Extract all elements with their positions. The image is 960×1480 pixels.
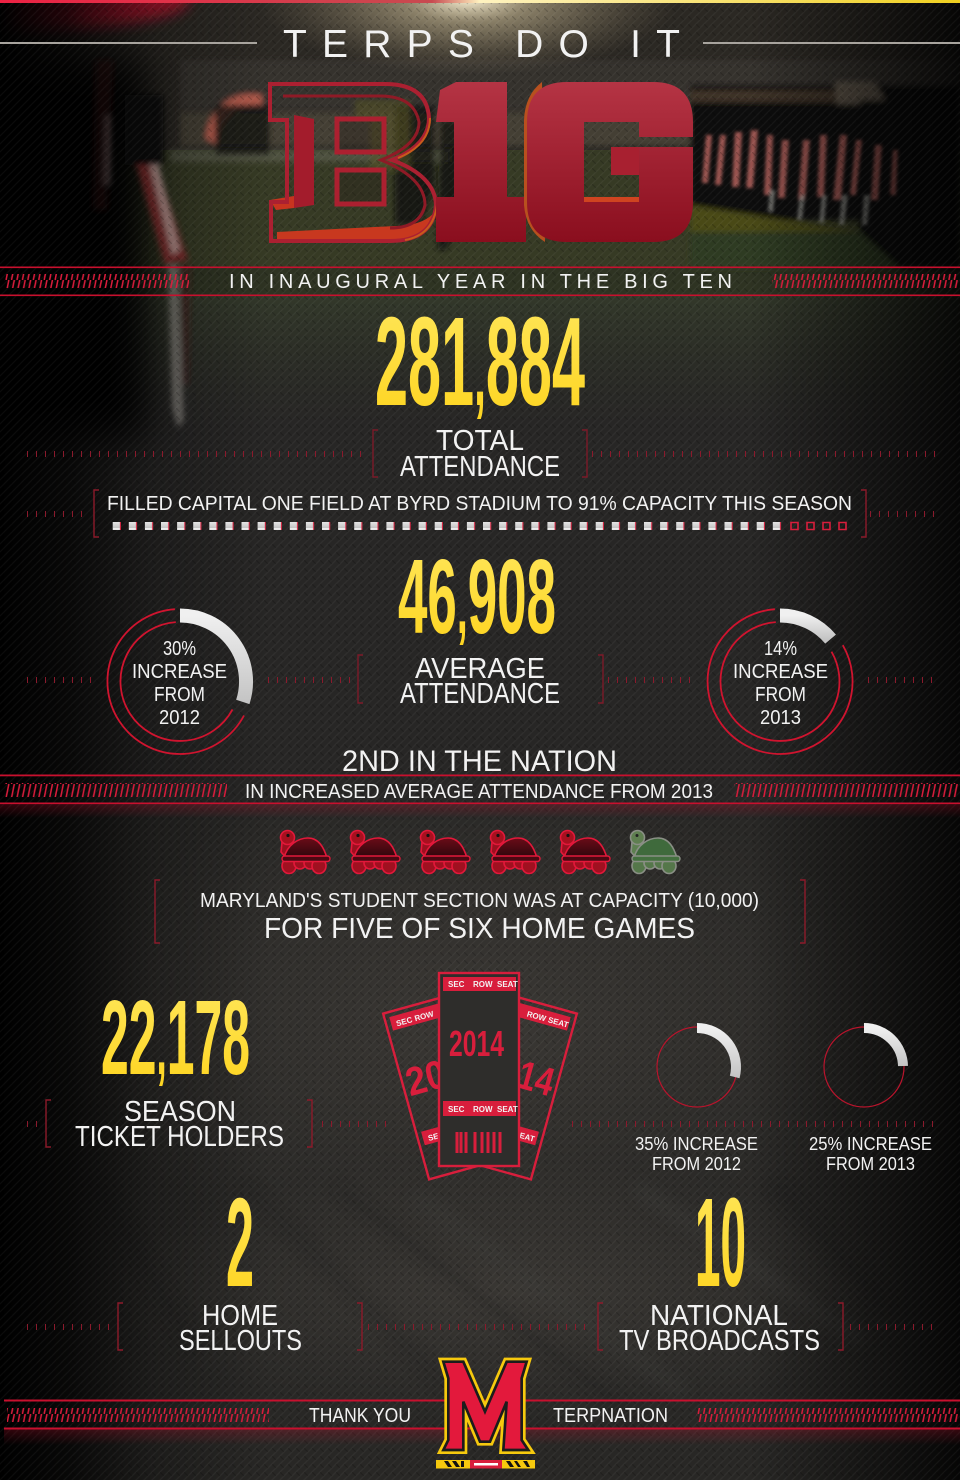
centre ticket (439, 973, 519, 1166)
centre ticket: ROW (473, 980, 493, 989)
right ticket: 14 (513, 1053, 560, 1105)
student section text (155, 880, 805, 945)
top colour bar (0, 0, 960, 3)
logo: big ten B1G (270, 82, 693, 242)
icon: red turtle 1 (280, 830, 330, 874)
centre ticket: SEAT (497, 980, 518, 989)
student section text: MARYLAND'S STUDENT SECTION WAS AT CAPACITY (10,000) (200, 890, 759, 912)
red corner glow (0, 0, 190, 30)
stat: home sellouts: 2 (226, 1172, 254, 1313)
band: inaugural year: IN INAUGURAL YEAR IN THE BIG TEN (229, 271, 732, 293)
small gauge: 25% increase from 2013 (809, 1027, 932, 1174)
icon: red turtle 3 (420, 830, 470, 874)
left ticket: 20 (401, 1052, 451, 1105)
gauge: 14% increase from 2013: 2013 (760, 707, 801, 729)
stat: home sellouts (27, 1172, 935, 1357)
small gauge: 35% increase from 2012: 35% INCREASE (635, 1134, 758, 1154)
letter B (270, 84, 437, 241)
stat: average attendance: 46,908 (398, 538, 556, 656)
band: 2nd in the nation (0, 745, 960, 818)
centre ticket: SEC (448, 1105, 465, 1114)
student section text: FOR FIVE OF SIX HOME GAMES (264, 913, 695, 945)
capacity bar (27, 490, 935, 537)
gauge: 30% increase from 2012: 30% (163, 638, 196, 660)
small gauge: 35% increase from 2012 (635, 1027, 758, 1174)
band: 2nd in the nation: 2ND IN THE NATION (342, 745, 617, 778)
band: inaugural year (0, 266, 960, 296)
left ticket: ROW (413, 1009, 435, 1023)
gauge: 30% increase from 2012: FROM (154, 684, 205, 706)
tickets illustration (383, 973, 577, 1179)
small gauge: 25% increase from 2013: 25% INCREASE (809, 1134, 932, 1154)
right ticket (452, 992, 577, 1179)
letter G (524, 82, 693, 242)
stat: average attendance: ATTENDANCE (400, 678, 560, 710)
stat: season ticket holders: 22,178 (101, 979, 250, 1097)
stat: average attendance: AVERAGE (415, 653, 545, 685)
right ticket: SEAT (547, 1015, 570, 1030)
gauge: 14% increase from 2013: FROM (755, 684, 806, 706)
gauge: 14% increase from 2013 (708, 609, 853, 754)
stat: national tv broadcasts: NATIONAL (650, 1300, 788, 1332)
stat: home sellouts: HOME (202, 1300, 278, 1332)
gauge: 14% increase from 2013: 14% (764, 638, 797, 660)
small gauge: 25% increase from 2013: FROM 2013 (826, 1154, 915, 1174)
left ticket: SEC (427, 1130, 445, 1143)
stat: average attendance (27, 538, 935, 710)
numeral 1 (436, 82, 526, 242)
footer band: THANK YOU (309, 1405, 411, 1427)
stat: season ticket holders: TICKET HOLDERS (75, 1121, 284, 1153)
centre ticket: SEAT (497, 1105, 518, 1114)
capacity bar: FILLED CAPITAL ONE FIELD AT BYRD STADIUM TO 91% CAPACITY THIS SEASON (107, 493, 852, 515)
stat: national tv broadcasts: TV BROADCASTS (619, 1325, 820, 1357)
footer band (4, 1400, 960, 1445)
icon: green turtle (630, 830, 680, 874)
footer band: TERPNATION (553, 1405, 668, 1427)
icon: red turtle 4 (490, 830, 540, 874)
ticks under ticket gauges (572, 1121, 935, 1127)
left ticket: SEC (395, 1015, 414, 1028)
centre ticket: SEC (448, 980, 465, 989)
gauge: 30% increase from 2012: 2012 (159, 707, 200, 729)
stat: season ticket holders: SEASON (124, 1096, 236, 1128)
title: terps do it: TERPS DO IT (283, 23, 680, 66)
icon: red turtle 2 (350, 830, 400, 874)
gauge: 14% increase from 2013: INCREASE (733, 661, 828, 683)
small gauge: 35% increase from 2012: FROM 2012 (652, 1154, 741, 1174)
header photo (0, 0, 960, 437)
stat: national tv broadcasts (598, 1172, 843, 1357)
stat: total attendance: ATTENDANCE (400, 451, 560, 483)
turtle row (280, 830, 680, 874)
stat: home sellouts: SELLOUTS (179, 1325, 302, 1357)
gauge: 30% increase from 2012: INCREASE (132, 661, 227, 683)
right ticket: SEAT (513, 1130, 536, 1144)
left ticket (383, 992, 508, 1179)
logo: maryland M (436, 1362, 535, 1468)
stat: national tv broadcasts: 10 (695, 1172, 746, 1313)
stat: total attendance: TOTAL (436, 425, 524, 457)
stat: total attendance: 281,884 (375, 291, 585, 432)
stat: season ticket holders (27, 979, 390, 1153)
gauge: 30% increase from 2012 (107, 609, 246, 754)
centre ticket: ROW (473, 1105, 493, 1114)
centre ticket: 2014 (449, 1023, 504, 1064)
black left shade (0, 62, 145, 437)
stat: total attendance (27, 291, 935, 483)
icon: red turtle 5 (560, 830, 610, 874)
band: 2nd in the nation: IN INCREASED AVERAGE ATTENDANCE FROM 2013 (245, 781, 713, 803)
right ticket: ROW (526, 1009, 547, 1024)
